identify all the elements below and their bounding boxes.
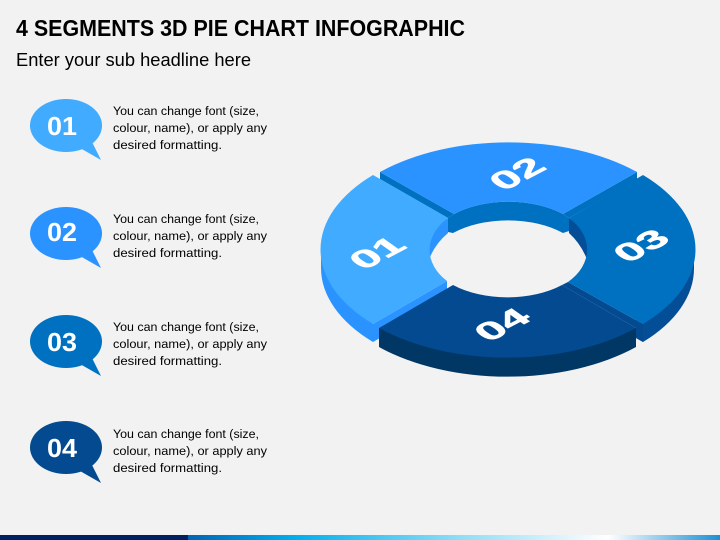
icon: speech bubble 01: 01: [47, 111, 77, 141]
segment 02: [380, 142, 637, 233]
icon: speech bubble 03: 03: [47, 327, 77, 357]
text block 04: desired formatting.: [113, 461, 222, 475]
text block 02: desired formatting.: [113, 246, 222, 260]
text block 03: desired formatting.: [113, 354, 222, 368]
icon: speech bubble 02: [30, 207, 102, 268]
text block 02: colour, name), or apply any: [113, 229, 268, 243]
text block 04: colour, name), or apply any: [113, 444, 268, 458]
icon: speech bubble 04: 04: [47, 433, 78, 463]
text block 02: You can change font (size,: [113, 212, 259, 226]
item 01: [30, 99, 268, 160]
icon: speech bubble 04: [30, 421, 102, 483]
icon: speech bubble 01: [30, 99, 102, 160]
footer bar: [0, 535, 720, 540]
text block 01: You can change font (size,: [113, 104, 259, 118]
text block 03: colour, name), or apply any: [113, 337, 268, 351]
segment 02: 02: [481, 152, 554, 196]
text block 03: You can change font (size,: [113, 320, 259, 334]
segment 01: 01: [341, 231, 414, 275]
text block 04: You can change font (size,: [113, 427, 259, 441]
text block 01: [113, 104, 268, 152]
text block 01: colour, name), or apply any: [113, 121, 268, 135]
item 03: [30, 315, 268, 376]
segment 04: 04: [466, 303, 539, 347]
text block 01: desired formatting.: [113, 138, 222, 152]
icon: speech bubble 02: 02: [47, 217, 77, 247]
text block 03: [113, 320, 268, 368]
segment 01: [321, 175, 448, 342]
icon: speech bubble 03: [30, 315, 102, 376]
segment 03: 03: [605, 224, 678, 268]
subtitle: Enter your sub headline here: [16, 50, 251, 70]
item 02: [30, 207, 268, 268]
text block 02: [113, 212, 268, 260]
title: 4 SEGMENTS 3D PIE CHART INFOGRAPHIC: [16, 15, 465, 41]
item 04: [30, 421, 268, 483]
segment 03: [562, 175, 695, 342]
segment 04: [379, 285, 636, 377]
text block 04: [113, 427, 268, 475]
chart: 3D ring: [321, 142, 695, 377]
